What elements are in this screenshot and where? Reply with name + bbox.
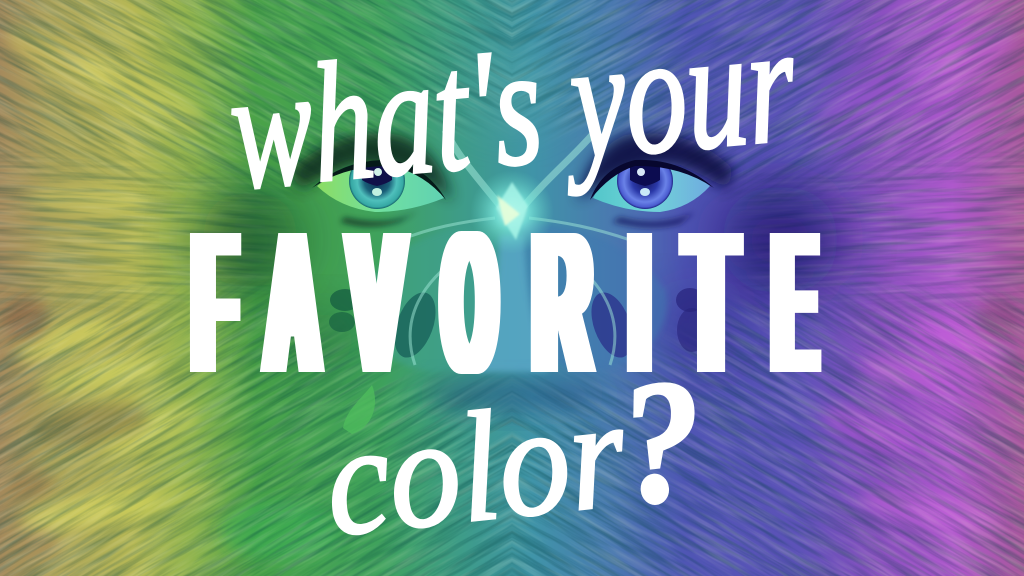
- poster: E: [774, 189, 816, 415]
- background: feather lobes right: [808, 13, 1022, 538]
- heading: FAVORITE: T: [685, 189, 737, 415]
- icon: leaf: [343, 385, 375, 434]
- heading: FAVORITE: F: [193, 189, 236, 415]
- background: soft shading: [200, 55, 840, 413]
- heading: FAVORITE: O: [443, 189, 496, 415]
- background: feather lobes left: [0, 13, 340, 563]
- eye: right: [578, 133, 734, 228]
- heading: FAVORITE: V: [349, 189, 404, 415]
- heading: FAVORITE: A: [266, 189, 319, 415]
- heading: FAVORITE: R: [534, 189, 590, 415]
- icon: glowing jewel: [470, 170, 554, 254]
- heading: color?: color?: [316, 342, 712, 573]
- heading: FAVORITE: I: [630, 189, 648, 415]
- face: butterfly mask: [329, 130, 707, 372]
- heading: FAVORITE: [193, 189, 816, 415]
- eye: left: [290, 133, 452, 227]
